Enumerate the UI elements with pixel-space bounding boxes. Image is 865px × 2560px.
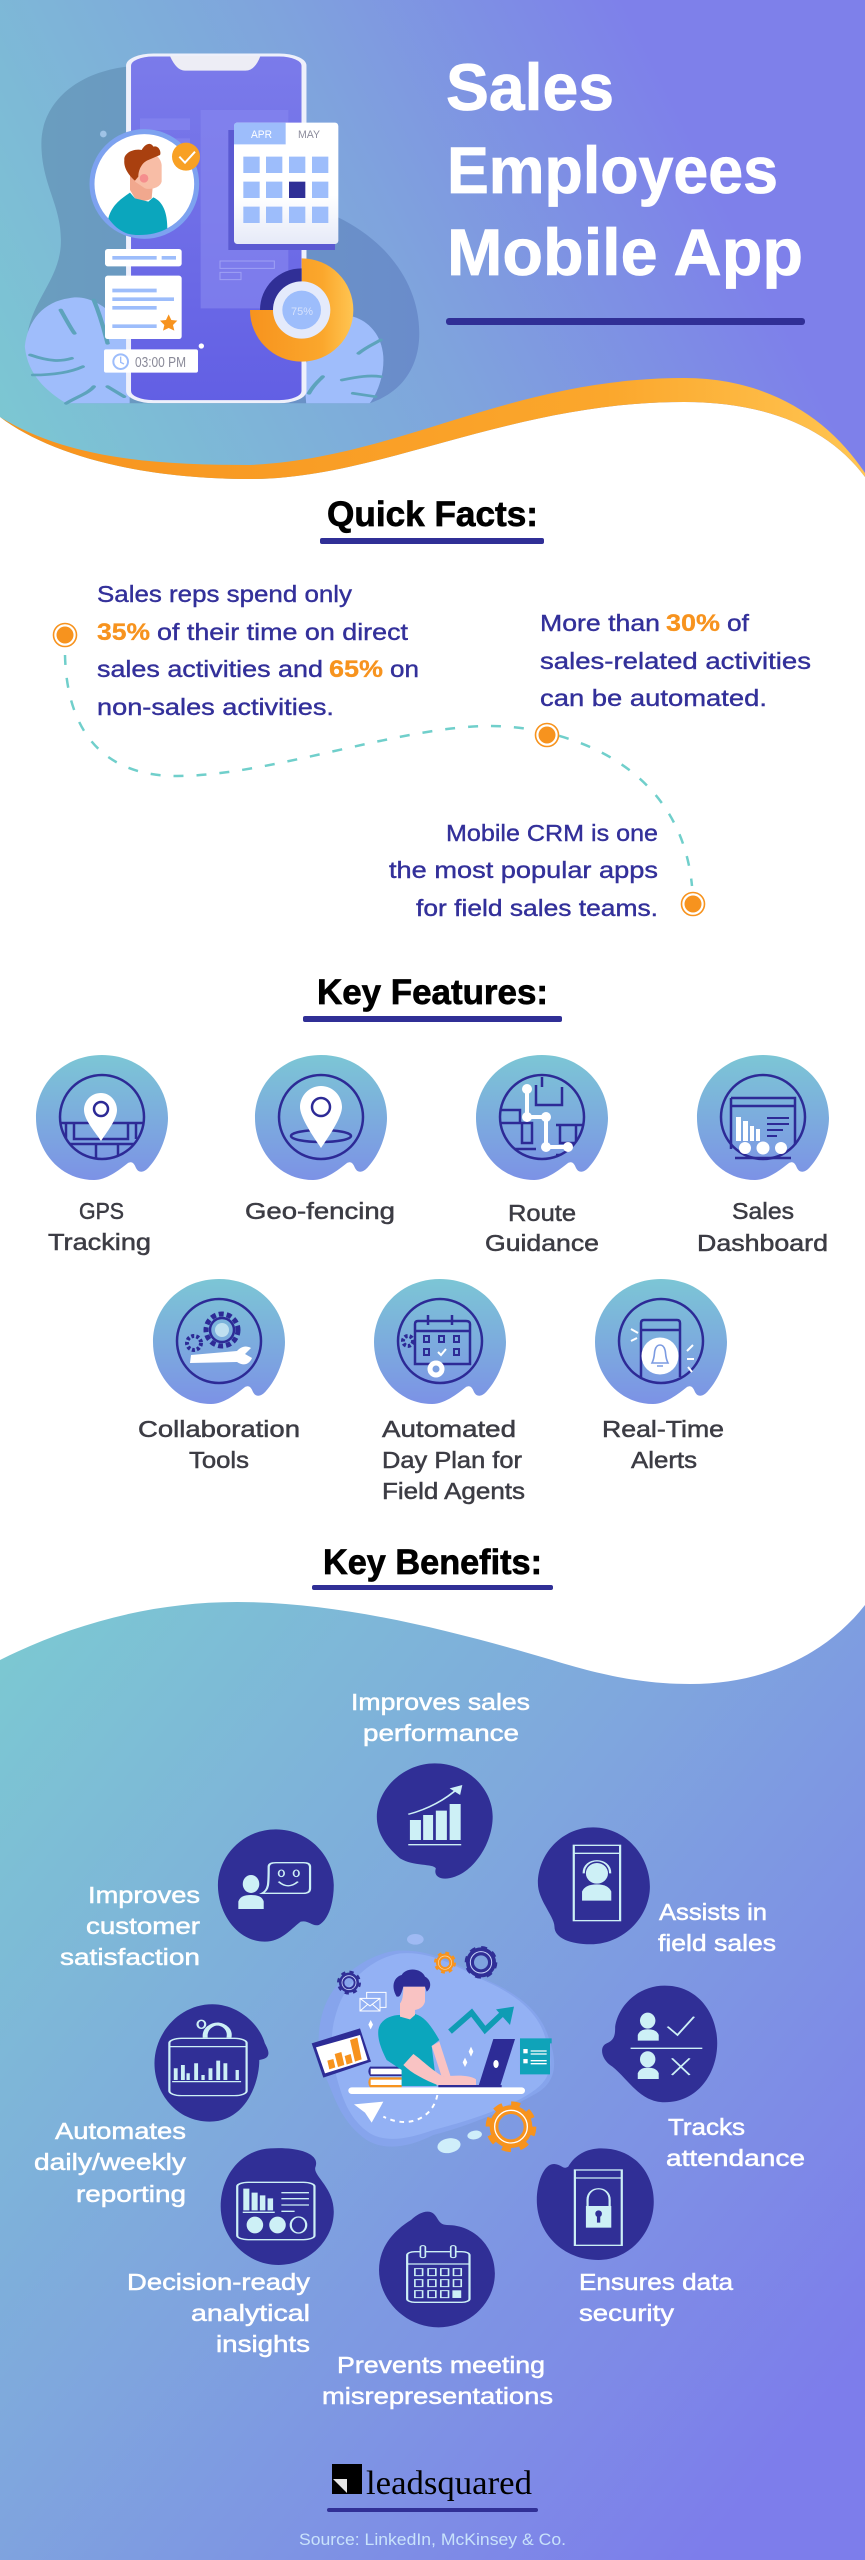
benefits panel background [0,1602,865,2560]
benefit labels: analytical [191,2300,310,2326]
donut chart [250,258,353,362]
title: Sales [446,50,614,124]
laptop [438,2039,515,2087]
feature labels [48,1198,828,1504]
title [446,50,803,289]
benefit icon: data security [537,2148,654,2260]
feature labels: Sales [732,1198,794,1224]
fact text 2: of [727,610,750,636]
heading: key benefits: Key Benefits: [323,1543,542,1582]
fact marker 3 [682,892,704,916]
small dot [100,131,107,137]
benefit icon: attendance [602,1986,717,2102]
fact text 2: More than [540,610,660,636]
benefit labels: performance [363,1720,519,1746]
feature icon: real-time alerts [595,1279,727,1404]
small info card [105,249,182,266]
heading: quick facts: Quick Facts: [327,495,538,534]
thought bubbles [436,2136,462,2155]
fact text 3: the most popular apps [389,857,658,883]
fact text 1: of their time on direct [157,619,409,645]
source line: Source: LinkedIn, McKinsey & Co. [299,2531,566,2549]
fact text 1: on [390,656,419,682]
benefit labels: daily/weekly [34,2149,187,2175]
hero small labels: APR [251,129,272,141]
feature labels: Tracking [48,1229,151,1255]
dashed trail [383,2095,437,2122]
benefit labels: satisfaction [60,1944,200,1970]
fact text 1: 65% [329,656,383,683]
profile avatar [92,132,200,236]
gear: navy [466,1948,496,1977]
title: Mobile App [447,215,803,289]
fact marker 1 [54,624,76,646]
hero small labels: MAY [298,129,321,141]
fact text 3: Mobile CRM is one [446,820,658,846]
benefit icon: analytical insights [221,2148,334,2265]
benefit labels: Tracks [668,2114,745,2140]
feature icon: route guidance [476,1055,608,1180]
leaf veins [30,300,381,403]
trend arrow [450,2013,503,2032]
feature labels: Day Plan for [382,1447,522,1473]
feature labels: Tools [189,1447,249,1473]
title rule [446,318,805,325]
time card [104,349,198,373]
benefit labels: Automates [55,2118,186,2144]
hero small labels: 75% [291,306,313,318]
benefit labels: customer [86,1913,200,1939]
left leaf [25,297,130,403]
top bubble [407,1934,424,1945]
phone notch [170,56,260,71]
benefit labels: attendance [666,2145,805,2171]
benefit labels: Decision-ready [127,2269,311,2295]
calendar card [228,123,338,250]
benefit icon: field sales assistance [538,1827,650,1944]
logo rule [327,2508,538,2512]
fact text 2 [540,610,811,711]
title: Employees [447,133,778,207]
dashed timeline connector [65,655,692,886]
fact text 3 [389,820,658,921]
benefit labels: Improves [88,1882,200,1908]
books [368,2067,402,2087]
fact text 2: can be automated. [540,685,767,711]
hero small labels [135,129,321,371]
feature labels: Alerts [631,1447,697,1473]
fact text 1: 35% [97,619,150,646]
hero small labels: 03:00 PM [135,355,186,371]
fact text 3: for field sales teams. [416,895,658,921]
feature icon: geo-fencing [255,1055,387,1180]
header background [0,0,865,510]
envelope [360,1992,386,2011]
gear: navy left [338,1972,360,1993]
feature labels: Geo-fencing [245,1198,395,1224]
benefit labels: field sales [658,1930,776,1956]
benefit labels: misrepresentations [322,2383,553,2409]
benefit labels: security [579,2300,675,2326]
fact text 1: non-sales activities. [97,694,334,720]
feature icon: sales dashboard [697,1055,829,1180]
fact text 2: 30% [666,610,720,637]
phone body [129,55,304,402]
sparkles [368,2020,473,2067]
bar chart board [312,2028,371,2078]
backdrop blob inner [332,1953,550,2139]
feature labels: Real-Time [602,1416,724,1442]
white dot [199,343,204,349]
feature labels: Dashboard [697,1230,828,1256]
backdrop blob outer [319,1950,554,2147]
orange wave ribbon [0,378,865,479]
backdrop blob [28,67,419,403]
fact text 1: Sales reps spend only [97,581,352,607]
benefit labels: insights [216,2331,310,2357]
benefit icon: customer satisfaction [218,1829,334,1942]
feature labels: Guidance [485,1230,599,1256]
fact text 1: sales activities and [97,656,323,682]
paper plane [354,2102,383,2123]
benefit labels [34,1689,805,2409]
benefit blobs, upper group [154,1763,717,2122]
benefit labels: Assists in [659,1899,767,1925]
desk [348,2087,525,2094]
gear: big orange [488,2104,534,2149]
feature icon: collaboration tools [153,1279,285,1404]
faint screen panels [140,110,288,308]
hero foreground: profile, calendar, cards and donut [92,110,353,373]
benefit labels: reporting [76,2181,186,2207]
fact text 1 [97,581,419,720]
benefit icon: meeting calendar [379,2212,495,2327]
benefit labels: Prevents meeting [337,2352,545,2378]
heading: key features: Key Features: [317,973,548,1012]
central illustration: person at laptop [312,1934,554,2155]
note card with star [105,276,182,339]
feature labels: GPS [79,1198,124,1224]
fact marker 2 [536,724,558,746]
feature labels: Automated [382,1416,516,1442]
right leaf [303,317,383,403]
benefit labels: Ensures data [579,2269,733,2295]
benefit icon: automated reporting [154,2004,268,2122]
task list card [520,2038,552,2074]
feature icon: GPS tracking [36,1055,168,1180]
benefit blobs, lower group [221,2148,654,2327]
feature labels: Collaboration [138,1416,300,1442]
logo: leadsquared: leadsquared [366,2465,532,2502]
benefit icon: sales performance chart [377,1763,493,1879]
benefit labels: Improves sales [351,1689,530,1715]
person [378,1970,476,2086]
feature icon: automated day plan [374,1279,506,1404]
hero backdrop: blob, leaves and phone [25,55,419,403]
gear: small orange [435,1953,455,1972]
fact text 2: sales-related activities [540,648,811,674]
white wave below header [0,402,865,510]
feature labels: Route [508,1200,576,1226]
feature labels: Field Agents [382,1478,525,1504]
